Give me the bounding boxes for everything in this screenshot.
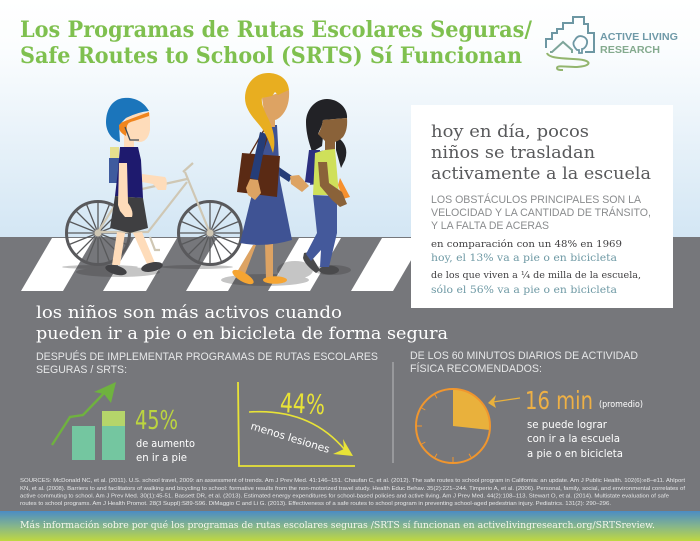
divider — [392, 362, 394, 463]
panel heading: activamente a la escuela — [431, 164, 651, 184]
bag handles — [250, 130, 268, 154]
obstacles text — [431, 193, 651, 232]
subheading: after SRTS — [36, 350, 378, 376]
footer text: Más información sobre por qué los programas de rutas escolares seguras /SRTS sí funcionan en activelivingresearch.org/SRTSreview. — [20, 520, 655, 531]
logo: Active Living Research — [546, 17, 678, 70]
far arm — [142, 174, 167, 190]
face — [262, 90, 289, 127]
obstacles text: Y LA FALTA DE ACERAS — [431, 220, 549, 232]
sources: KN, et al. (2008). Barriers to and facilitators of walking and bicycling to school: formative results from the non-motorized travel study. Health Educ Behav. 35(2):221–244. Timperio A, et al. (2006). Personal, family, social, and environmental correlates of — [20, 486, 686, 492]
shoes — [230, 267, 287, 287]
shadows on crosswalk — [62, 261, 351, 286]
face — [318, 118, 347, 142]
shoes — [104, 260, 164, 277]
neck — [325, 138, 335, 152]
clock sector — [453, 389, 490, 430]
16 min caption: se puede lograr — [527, 418, 607, 431]
16 min caption: con ir a la escuela — [527, 432, 620, 445]
icon: bicycle — [66, 163, 242, 265]
subheading: 60 minutes: DE LOS 60 MINUTOS DIARIOS DE ACTIVIDAD — [410, 350, 638, 362]
falling curve arrow — [249, 412, 353, 456]
footer band — [0, 511, 700, 541]
book — [338, 178, 350, 199]
title: Safe Routes to School (SRTS) Sí Funcionan — [20, 43, 522, 69]
legs — [112, 232, 155, 265]
sources: SOURCES: McDonald NC, et al. (2011). U.S. school travel, 2009: an assessment of trends. Am J Prev Med. 41:146–151. Chaufan C, et al. (2012). The safe routes to school program in California: an update. Am J Public Health. 102(6):e8–e11. Ahlport — [20, 478, 686, 484]
heading: children more active: los niños son más activos cuando — [36, 303, 342, 323]
figure: boy with helmet — [104, 98, 167, 277]
rising arrow — [52, 382, 116, 445]
background asphalt — [0, 237, 700, 512]
chart: clock 16 minutes — [416, 389, 520, 463]
backpack — [305, 150, 330, 185]
statistic 13 percent: hoy, el 13% va a pie o en bicicleta — [431, 252, 617, 264]
statistic 56 percent — [431, 270, 641, 296]
title — [20, 17, 533, 69]
heading: children more active — [36, 303, 448, 344]
16 min value: (promedio) — [599, 400, 643, 410]
caption: de aumento — [136, 437, 195, 450]
statistic 13 percent — [431, 239, 622, 264]
obstacles text: VELOCIDAD Y LA CANTIDAD DE TRÁNSITO, — [431, 206, 651, 219]
bars — [72, 411, 125, 460]
panel heading: niños se trasladan — [431, 143, 595, 163]
caption: en ir a pie — [136, 451, 187, 464]
hair — [118, 112, 149, 136]
statistic 56 percent: de los que viven a ¼ de milla de la escuela, — [431, 270, 641, 281]
sources — [20, 478, 686, 507]
arm left — [246, 132, 267, 200]
chart: 45 percent increase — [52, 382, 195, 464]
16 min value: 16 min — [525, 386, 593, 415]
pants — [306, 195, 337, 267]
hair — [245, 73, 289, 153]
heading: children more active: pueden ir a pie o en bicicleta de forma segura — [36, 324, 448, 344]
16 min caption: a pie o en bicicleta — [527, 447, 623, 460]
subheading: 60 minutes: FÍSICA RECOMENDADOS: — [410, 362, 542, 375]
shoes — [303, 252, 339, 274]
near arm — [118, 163, 132, 217]
statistic 56 percent: sólo el 56% va a pie o en bicicleta — [431, 284, 617, 296]
value: 45% — [135, 406, 178, 436]
arm — [318, 162, 347, 207]
dress — [240, 125, 292, 245]
axes — [238, 382, 355, 466]
back hair — [306, 99, 347, 168]
crosswalk stripes — [21, 238, 424, 291]
backpack — [109, 147, 119, 183]
legs — [237, 242, 273, 279]
panel heading: hoy en día, pocos — [431, 122, 589, 142]
skirt — [110, 196, 148, 233]
subheading: after SRTS: SEGURAS / SRTS: — [36, 364, 127, 376]
value: 44% — [279, 388, 326, 421]
obstacles text: LOS OBSTÁCULOS PRINCIPALES SON LA — [431, 193, 642, 206]
neck and face — [124, 113, 150, 147]
chart: 44 percent fewer injuries — [238, 382, 355, 466]
logo: Active Living Research: RESEARCH — [600, 44, 660, 56]
arm right — [274, 165, 309, 192]
caption — [136, 437, 195, 464]
title: Los Programas de Rutas Escolares Seguras/ — [20, 17, 533, 43]
figure: woman with bag — [230, 73, 309, 287]
clock face — [416, 389, 490, 463]
figure: girl with backpack — [303, 99, 350, 274]
panel heading — [431, 122, 651, 184]
sources: active commuting to school. Am J Prev Med. 30(1):45-51. Bassett DR, et al. (2013). Estimated energy expenditures for school-based policies and active living. Am J Prev Med. 44(2):108–113. Stewart O, et al. (2014). Multistate evaluation of safe — [20, 494, 669, 500]
16 min caption — [527, 418, 623, 460]
caption: menos lesiones — [249, 420, 331, 456]
shirt — [313, 149, 339, 195]
subheading: after SRTS: DESPUÉS DE IMPLEMENTAR PROGRAMAS DE RUTAS ESCOLARES — [36, 350, 378, 363]
sources: routes to school programs. Am J Health Promot. 28(3 Suppl):S89-S96. DiMaggio C and Li G. (2013). Effectiveness of a safe routes to school program in preventing school-aged pedestrian injury. Pediatrics. 131(2): 290–296. — [20, 501, 611, 507]
helmet — [106, 98, 149, 142]
shirt — [115, 147, 143, 198]
statistic 13 percent: en comparación con un 48% en 1969 — [431, 239, 622, 250]
subheading: 60 minutes — [410, 350, 638, 375]
bag — [237, 153, 280, 197]
background sky — [0, 0, 700, 238]
logo: Active Living Research: ACTIVE LIVING — [600, 31, 678, 43]
helmet strap — [125, 127, 139, 140]
pointer arrow — [488, 395, 520, 408]
panel: today few children — [411, 105, 673, 308]
